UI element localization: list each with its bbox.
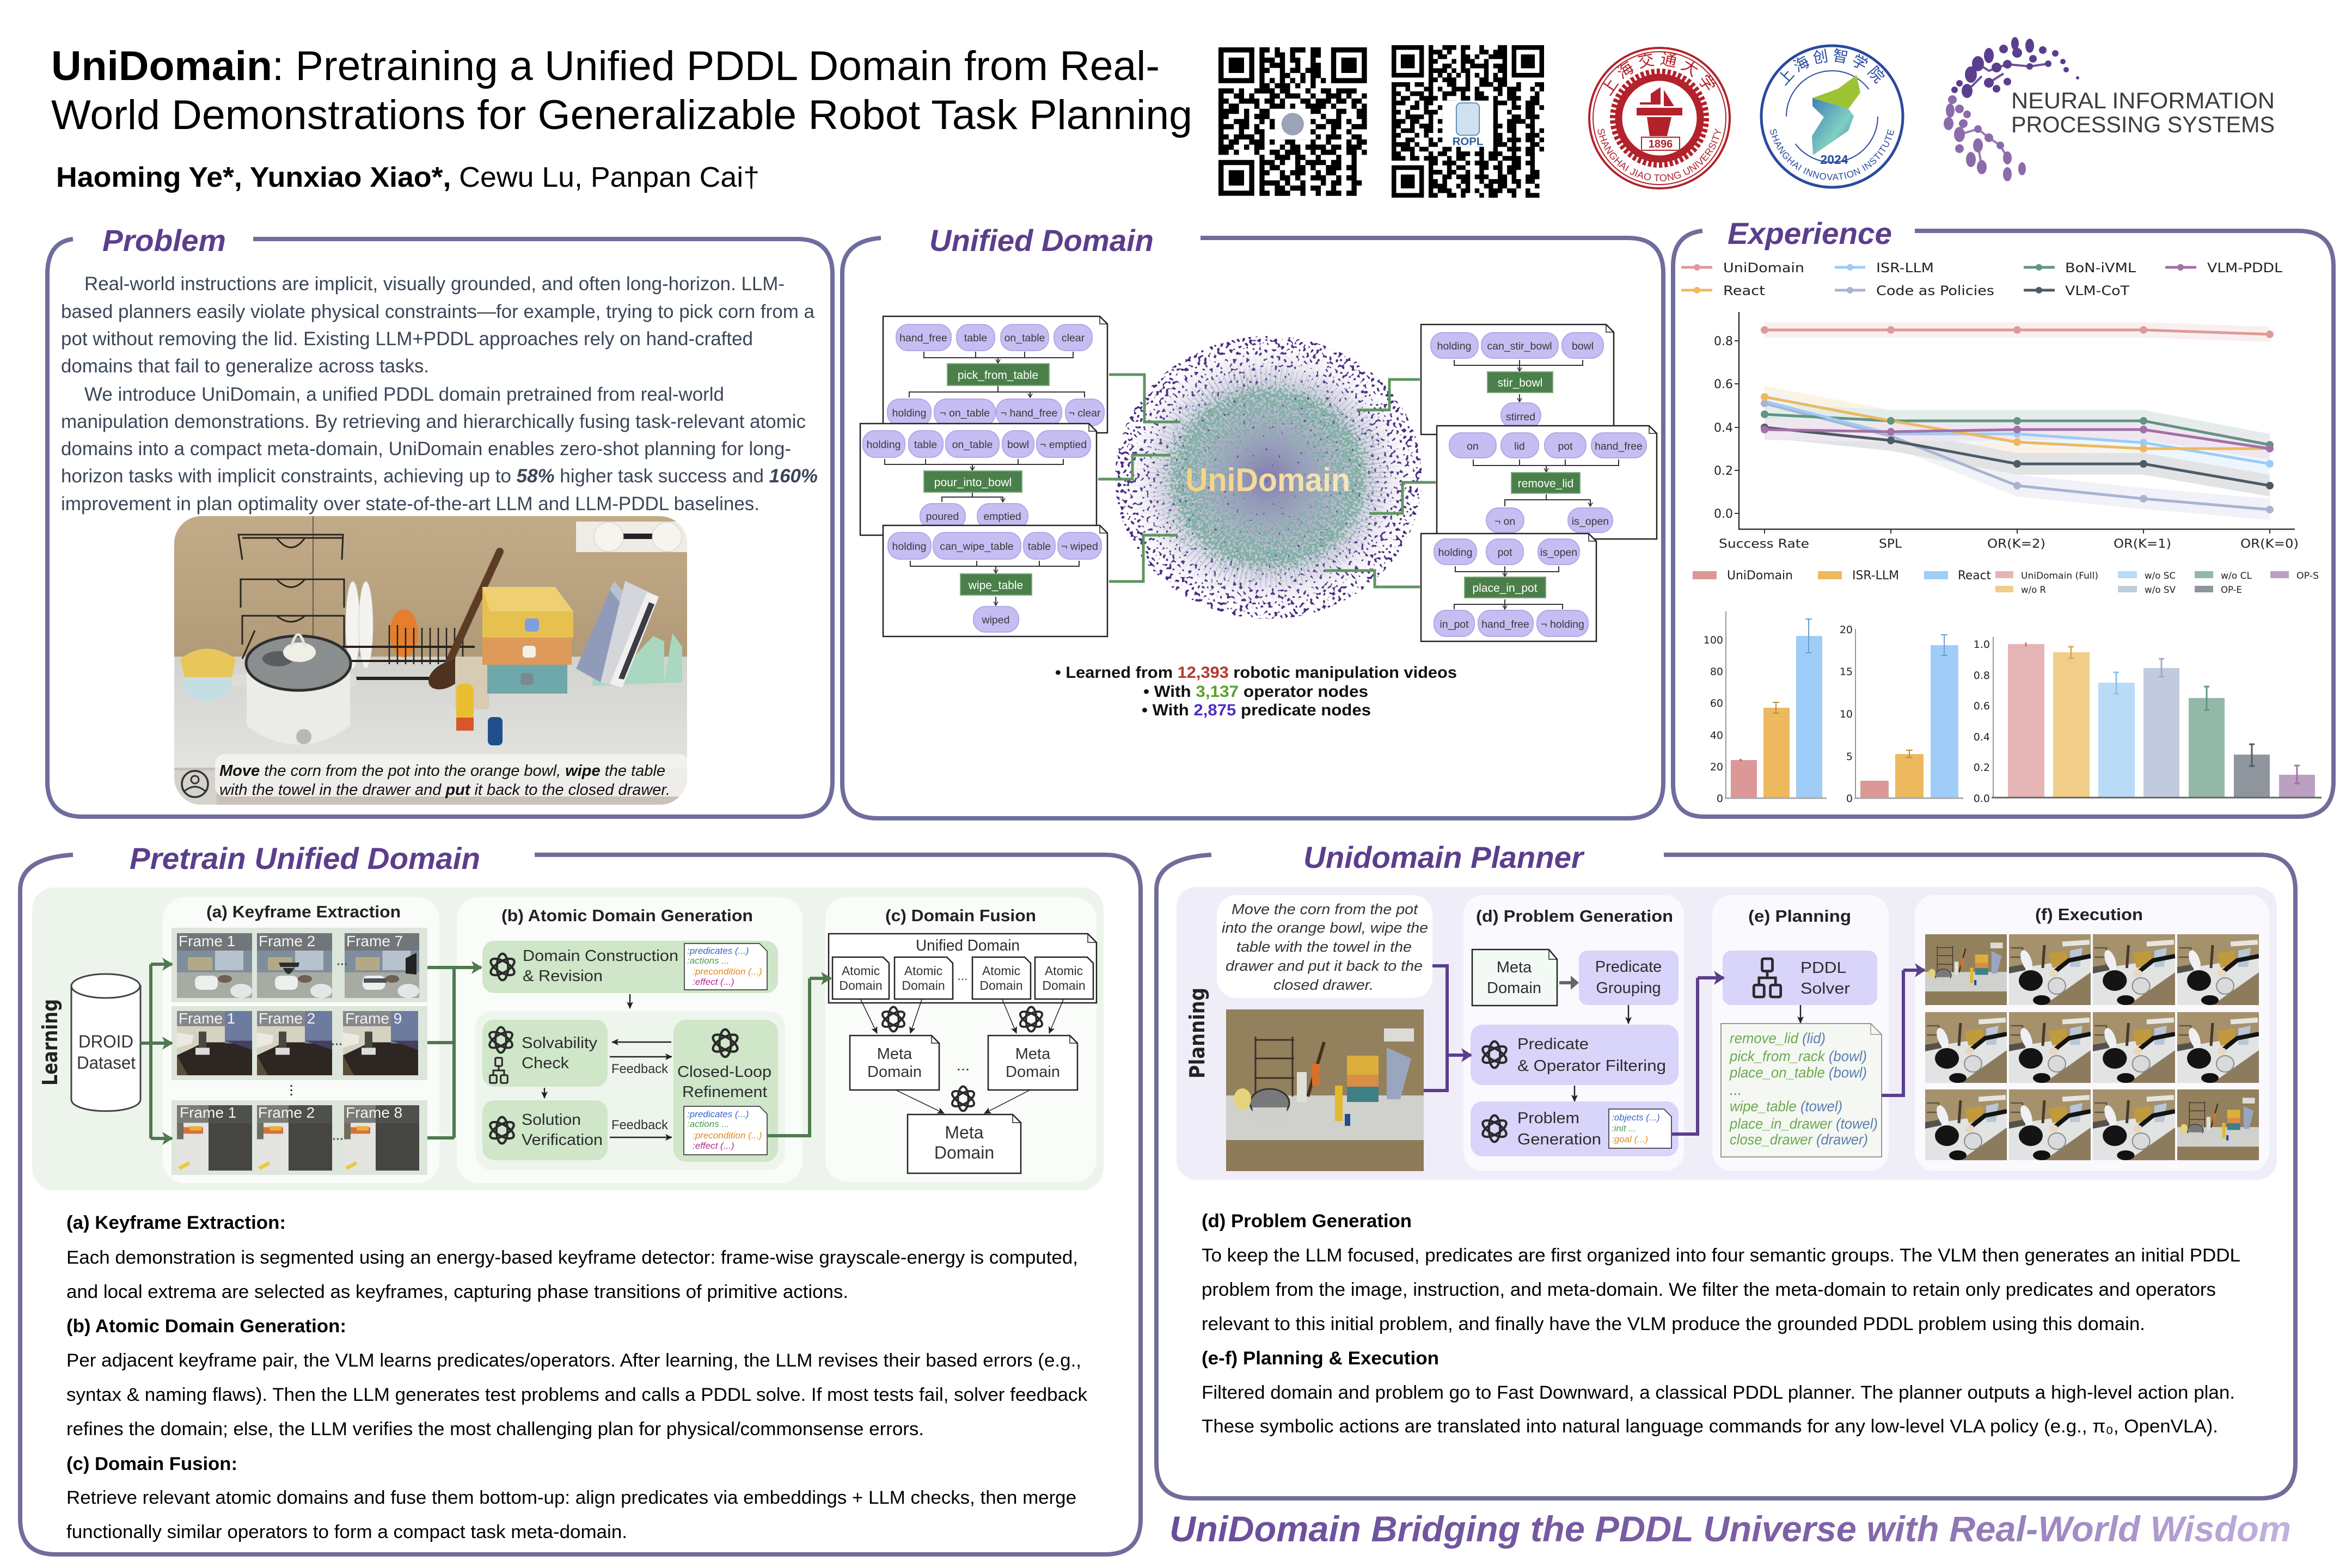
logo: Shanghai Innovation Institute: 2024: [1820, 152, 1848, 167]
panel (b): Atomic Domain Generation: :effect (...): [693, 977, 734, 987]
bar chart: time: 15: [1840, 666, 1853, 678]
legend: bar charts A: [1693, 569, 1991, 583]
logo: Shanghai Jiao Tong University seal: SHANGHAI JIAO TONG UNIVERSITY: [1597, 128, 1721, 181]
operator: remove_lid: [1437, 426, 1657, 539]
legend: line chart: [1681, 260, 2283, 298]
logo: NeurIPS: PROCESSING SYSTEMS: [2011, 112, 2275, 137]
panel (c): Domain Fusion: Meta: [945, 1123, 984, 1142]
QR code 2: [1392, 45, 1544, 198]
operator: place_in_pot: [1421, 534, 1596, 641]
text block: Atomic Domain Generation: Per adjacent keyframe pair, the VLM learns predicates/operators. After learning, the LLM revises their based errors (e.g.,: [66, 1350, 1081, 1371]
bar chart: time: 5: [1846, 751, 1853, 763]
bar chart: steps: 40: [1710, 730, 1723, 742]
photo: kitchen scene with instruction caption: [174, 516, 690, 805]
operator: wipe_table: ¬ wiped: [1061, 541, 1098, 553]
bar chart: ablation: 0.8: [1974, 670, 1990, 682]
operator: pick_from_table: clear: [1062, 332, 1085, 344]
panel (d): Problem Generation: Grouping: [1596, 979, 1661, 997]
panel (e): Planning: close_drawer (drawer): [1730, 1131, 1868, 1148]
DROID dataset cylinder: [71, 974, 140, 1111]
panel (e): Planning: pick_from_rack (bowl): [1729, 1048, 1867, 1064]
operator: place_in_pot: ¬ holding: [1541, 618, 1584, 630]
network graph: UniDomain: [1115, 336, 1422, 619]
text block: problem statement: horizon tasks with implicit constraints, achieving up to 58% higher task success and 160%: [61, 465, 818, 487]
operator: place_in_pot: in_pot: [1440, 618, 1469, 630]
panel (d): Problem Generation: Predicate: [1595, 958, 1662, 976]
panel (d): Problem Generation: & Operator Filtering: [1517, 1057, 1666, 1075]
text block: Problem Generation: problem from the image, instruction, and meta-domain. We filter the meta-domain to retain only predicates and operators: [1202, 1279, 2216, 1300]
text block: Domain Fusion: (c) Domain Fusion:: [66, 1454, 237, 1474]
text block: problem statement: domains into a compact meta-domain, UniDomain enables zero-shot planning for long-: [61, 438, 791, 460]
panel (a): Keyframe Extraction: Frame 1: [180, 1104, 236, 1121]
bar chart: steps: 0: [1717, 793, 1723, 805]
panel (c): Domain Fusion: ...: [957, 969, 968, 983]
bar chart: steps: 20: [1710, 761, 1723, 773]
legend: bar charts A: UniDomain: [1727, 569, 1793, 583]
panel (c): Domain Fusion: Domain: [979, 978, 1023, 993]
instruction card: Move the corn from the pot: [1232, 901, 1419, 917]
panel (d): Problem Generation: Meta: [1497, 959, 1532, 976]
panel (c): Domain Fusion: Domain: [867, 1063, 922, 1081]
label: UniDomain: UniDomain: [1185, 462, 1350, 498]
text block: Keyframe Extraction: Each demonstration is segmented using an energy-based keyframe detector: frame-wise grayscale-energy is computed,: [66, 1247, 1078, 1268]
arrow: problem to planner: [1671, 978, 1724, 1134]
operator: pick_from_table: hand_free: [899, 332, 947, 344]
legend: bar chart B: w/o SV: [2145, 585, 2176, 596]
logo: Shanghai Innovation Institute: SHANGHAI INNOVATION INSTITUTE: [1770, 129, 1895, 181]
panel: Experience: [1673, 216, 2333, 817]
panel (b): Atomic Domain Generation: Check: [522, 1055, 569, 1072]
legend: bar charts A: ISR-LLM: [1852, 569, 1899, 583]
operator: pick_from_table: ¬ on_table: [940, 407, 990, 419]
panel (a): Keyframe Extraction: Frame 2: [259, 933, 315, 950]
panel (d): Problem Generation: Domain: [1487, 979, 1541, 997]
legend: bar chart B: w/o R: [2021, 585, 2046, 596]
DROID dataset cylinder: Dataset: [77, 1053, 136, 1073]
operator: stir_bowl: stir_bowl: [1498, 377, 1542, 389]
arrows: inputs to problem generation: [1424, 966, 1471, 1091]
operator: pick_from_table: table: [964, 332, 987, 344]
operator: wipe_table: can_wipe_table: [940, 541, 1014, 553]
line chart: success metrics: 0.4: [1714, 421, 1733, 435]
legend: line chart: BoN-iVML: [2065, 260, 2136, 275]
operator: pour_into_bowl: pour_into_bowl: [934, 476, 1012, 489]
panel: Unified Domain: [842, 223, 1663, 818]
bar chart: time: [1840, 624, 1963, 805]
legend: bar chart B: OP-S: [2296, 571, 2319, 581]
arrows: keyframes to atomic domain: [427, 967, 481, 1138]
instruction card: table with the towel in the: [1236, 939, 1412, 955]
panel (a): Keyframe Extraction: Frame 8: [346, 1104, 402, 1121]
text block: problem statement: [61, 273, 818, 514]
caption: with the towel in the drawer and put it back to the closed drawer.: [219, 781, 670, 799]
text block: Atomic Domain Generation: [66, 1316, 1088, 1440]
operator: pour_into_bowl: emptied: [983, 511, 1021, 523]
operator: remove_lid: remove_lid: [1518, 477, 1573, 490]
panel (b): Atomic Domain Generation: :predicates (...): [687, 946, 749, 956]
text block: Problem Generation: relevant to this initial problem, and finally have the VLM produce the grounded PDDL problem using this domain.: [1202, 1314, 2145, 1334]
panel (b): Atomic Domain Generation: :actions ...: [687, 955, 729, 966]
operator: wipe_table: table: [1028, 541, 1051, 553]
text block: Atomic Domain Generation: syntax & naming flaws). Then the LLM generates test problems and calls a PDDL solve. If most tests fail, solver feedback: [66, 1385, 1088, 1405]
operator: place_in_pot: holding: [1438, 547, 1472, 559]
operator: remove_lid: on: [1467, 440, 1479, 452]
operator: wipe_table: wiped: [982, 614, 1009, 626]
arrow: plan to execution: [1882, 970, 1925, 1095]
operator: stir_bowl: bowl: [1572, 340, 1594, 352]
QR code 2: ROPL: [1453, 136, 1483, 148]
panel (c): Domain Fusion: Domain: [839, 978, 883, 993]
DROID dataset cylinder: DROID: [78, 1032, 133, 1051]
panel (b): Atomic Domain Generation: :precondition (...): [693, 966, 762, 977]
panel (a): Keyframe Extraction: Frame 1: [179, 933, 235, 950]
bar chart: ablation: 0.4: [1974, 731, 1990, 743]
operator: remove_lid: lid: [1514, 440, 1525, 452]
heading: Problem: Problem: [102, 223, 226, 258]
footer tagline: UniDomain Bridging the PDDL Universe with Real-World Wisdom: [1169, 1509, 2291, 1549]
stats list: • With 2,875 predicate nodes: [1142, 701, 1371, 719]
panel (d): Problem Generation: Predicate: [1517, 1036, 1589, 1053]
panel (d): Problem Generation: :init ...: [1612, 1123, 1636, 1134]
panel (b): Atomic Domain Generation: Feedback: [611, 1118, 669, 1132]
caption: Move the corn from the pot into the orange bowl, wipe the table: [219, 762, 665, 780]
operator: place_in_pot: hand_free: [1481, 618, 1529, 630]
title: World Demonstrations for Generalizable Robot Task Planning: [51, 92, 1192, 138]
stats list: • With 3,137 operator nodes: [1143, 683, 1368, 701]
heading: Pretrain Unified Domain: Pretrain Unified Domain: [130, 841, 480, 875]
stats list: • Learned from 12,393 robotic manipulation videos: [1055, 664, 1457, 682]
bar chart: steps: 60: [1710, 697, 1723, 709]
panel (b): Atomic Domain Generation: [457, 897, 803, 1183]
text block: Problem Generation: [1202, 1211, 2240, 1334]
panel (c): Domain Fusion: Domain: [902, 978, 945, 993]
line chart: success metrics: OR(K=0): [2240, 537, 2299, 551]
panel (b): Atomic Domain Generation: :predicates (...): [687, 1109, 749, 1119]
title: [51, 43, 1192, 138]
operator: pour_into_bowl: table: [914, 439, 937, 451]
panel (b): Atomic Domain Generation: Solution: [522, 1111, 581, 1129]
panel (c): Domain Fusion: Meta: [877, 1045, 912, 1063]
legend: line chart: UniDomain: [1723, 260, 1804, 275]
text block: Problem Generation: (d) Problem Generation: [1202, 1211, 1412, 1232]
legend: line chart: VLM-PDDL: [2207, 260, 2283, 275]
bar chart: ablation: 1.0: [1974, 639, 1990, 651]
panel (b): Atomic Domain Generation: & Revision: [523, 967, 603, 985]
panel (a): Keyframe Extraction: Frame 9: [345, 1010, 402, 1027]
operator: stir_bowl: holding: [1437, 340, 1471, 352]
panel: Pretrain Unified Domain: [20, 841, 1141, 1554]
panel (b): Atomic Domain Generation: Feedback: [611, 1062, 669, 1076]
text block: Keyframe Extraction: and local extrema are selected as keyframes, capturing phase transitions of primitive actions.: [66, 1282, 848, 1302]
label: Learning: Learning: [38, 999, 62, 1086]
bar chart: steps: [1704, 611, 1827, 805]
panel (b): Atomic Domain Generation: :effect (...): [693, 1141, 734, 1151]
panel (f): Execution: [1915, 895, 2269, 1171]
panel (a): Keyframe Extraction: Frame 2: [259, 1010, 315, 1027]
panel: Problem: [47, 223, 832, 817]
operator: remove_lid: ¬ on: [1494, 516, 1515, 528]
arrow: refinement to fusion: [767, 978, 831, 1136]
logo: Shanghai Jiao Tong University seal: 上海交通大学: [1602, 51, 1716, 96]
line chart: success metrics: 0.6: [1714, 378, 1733, 391]
text block: Planning and Execution: Filtered domain and problem go to Fast Downward, a classical PDDL planner. The planner outputs a high-level action plan.: [1202, 1382, 2235, 1403]
bar chart: time: 0: [1846, 793, 1853, 805]
operator: wipe_table: [883, 525, 1107, 636]
label: Planning: Planning: [1185, 988, 1209, 1079]
scene image: [1226, 1009, 1424, 1171]
logo: NeurIPS: [1944, 37, 2275, 181]
panel (b): Atomic Domain Generation: Closed-Loop: [677, 1063, 771, 1081]
legend: line chart: Code as Policies: [1876, 283, 1994, 298]
text block: problem statement: Real-world instructions are implicit, visually grounded, and often long-horizon. LLM-: [84, 273, 785, 295]
panel (e): Planning: place_on_table (bowl): [1729, 1064, 1867, 1081]
heading: Unidomain Planner: Unidomain Planner: [1303, 840, 1585, 874]
text block: Keyframe Extraction: [66, 1212, 1078, 1302]
legend: bar chart B: OP-E: [2221, 585, 2242, 596]
panel (e): Planning: place_in_drawer (towel): [1729, 1116, 1878, 1132]
planning pipeline diagram: [1177, 887, 2277, 1180]
line chart: success metrics: [1714, 312, 2299, 551]
bar chart: time: 20: [1840, 624, 1853, 636]
instruction card: closed drawer.: [1273, 977, 1374, 993]
panel (b): Atomic Domain Generation: Verification: [522, 1131, 603, 1149]
panel (f): Execution: (f) Execution: [2035, 905, 2143, 924]
panel (e): Planning: PDDL: [1800, 959, 1846, 977]
legend: line chart: VLM-CoT: [2065, 283, 2129, 298]
text block: Keyframe Extraction: (a) Keyframe Extraction:: [66, 1212, 286, 1233]
logo: Shanghai Innovation Institute: 上海创智学院: [1779, 48, 1885, 86]
legend: bar chart B: w/o SC: [2145, 571, 2176, 581]
operator: pick_from_table: ¬ hand_free: [1001, 407, 1057, 419]
bar chart: ablation: [1974, 637, 2322, 805]
learning pipeline diagram: [32, 887, 1104, 1190]
text block: problem statement: pot without removing the lid. Existing LLM+PDDL approaches rely on hand-crafted: [61, 328, 753, 350]
panel (c): Domain Fusion: Atomic: [904, 964, 942, 978]
operator: place_in_pot: pot: [1497, 547, 1512, 559]
panel (e): Planning: Solver: [1800, 980, 1850, 997]
authors: Haoming Ye*, Yunxiao Xiao*, Cewu Lu, Panpan Cai†: [56, 162, 759, 193]
legend: line chart: React: [1723, 283, 1765, 298]
panel (d): Problem Generation: Problem: [1517, 1110, 1579, 1127]
operator: pick_from_table: holding: [892, 407, 926, 419]
title: UniDomain: Pretraining a Unified PDDL Domain from Real-: [51, 43, 1160, 89]
panel (d): Problem Generation: :objects (...): [1612, 1112, 1660, 1123]
bar chart: ablation: 0.6: [1974, 700, 1990, 712]
stats list: [1055, 664, 1457, 719]
text block: Planning and Execution: [1202, 1348, 2235, 1437]
panel (d): Problem Generation: (d) Problem Generation: [1476, 906, 1673, 926]
operator: place_in_pot: place_in_pot: [1472, 582, 1538, 595]
operator: remove_lid: is_open: [1572, 516, 1609, 528]
operator: pick_from_table: ¬ clear: [1068, 407, 1101, 419]
operator: pick_from_table: on_table: [1004, 332, 1045, 344]
bar chart: ablation: 0.2: [1974, 762, 1990, 774]
panel (c): Domain Fusion: Unified Domain: [916, 937, 1020, 954]
text block: problem statement: based planners easily violate physical constraints—for example, trying to pick corn from a: [61, 301, 815, 322]
operator: wipe_table: holding: [892, 541, 926, 553]
panel (c): Domain Fusion: ...: [957, 1057, 970, 1074]
panel (c): Domain Fusion: Domain: [934, 1143, 994, 1162]
operator: pour_into_bowl: holding: [867, 439, 901, 451]
panel: Unidomain Planner: [1156, 840, 2295, 1498]
panel (e): Planning: (e) Planning: [1748, 906, 1851, 926]
heading: Unified Domain: Unified Domain: [929, 223, 1154, 258]
operator: remove_lid: hand_free: [1595, 440, 1643, 452]
panel (b): Atomic Domain Generation: :precondition (...): [693, 1130, 762, 1141]
arrows: dataset to keyframes: [140, 964, 172, 1138]
panel (a): Keyframe Extraction: Frame 1: [179, 1010, 235, 1027]
text block: Planning and Execution: These symbolic actions are translated into natural language commands for any low-level VLA policy (e.g., π₀, OpenVLA).: [1202, 1416, 2218, 1437]
operator: pick_from_table: pick_from_table: [958, 369, 1038, 382]
operator: wipe_table: wipe_table: [968, 579, 1023, 592]
operator: pour_into_bowl: ¬ emptied: [1040, 439, 1087, 451]
panel (a): Keyframe Extraction: (a) Keyframe Extraction: [206, 902, 401, 921]
text block: Domain Fusion: Retrieve relevant atomic domains and fuse them bottom-up: align predicates via embeddings + LLM checks, then merge: [66, 1487, 1076, 1508]
legend: bar chart B: w/o CL: [2221, 571, 2252, 581]
bar chart: time: 10: [1840, 708, 1853, 720]
panel (d): Problem Generation: Generation: [1517, 1131, 1601, 1148]
panel (c): Domain Fusion: Domain: [1006, 1063, 1060, 1081]
bar chart: steps: 80: [1710, 666, 1723, 678]
line chart: success metrics: 0.8: [1714, 335, 1733, 348]
panel (e): Planning: remove_lid (lid): [1730, 1030, 1826, 1046]
panel (e): Planning: [1712, 895, 1889, 1171]
text block: Atomic Domain Generation: (b) Atomic Domain Generation:: [66, 1316, 346, 1337]
connectors between operators and graph: [1098, 375, 1436, 587]
bar chart: ablation: 0.0: [1974, 793, 1990, 805]
line chart: success metrics: OR(K=2): [1987, 537, 2045, 551]
text block: Planning and Execution: (e-f) Planning & Execution: [1202, 1348, 1439, 1369]
legend: line chart: ISR-LLM: [1876, 260, 1934, 275]
line chart: success metrics: SPL: [1879, 537, 1902, 551]
line chart: success metrics: 0.2: [1714, 464, 1733, 478]
operator: place_in_pot: is_open: [1540, 547, 1577, 559]
panel (c): Domain Fusion: Domain: [1042, 978, 1086, 993]
text block: problem statement: improvement in plan optimality over state-of-the-art LLM and LLM-PDDL baselines.: [61, 493, 759, 514]
caption: [219, 762, 670, 799]
text block: problem statement: We introduce UniDomain, a unified PDDL domain pretrained from real-world: [84, 384, 724, 405]
bar chart: steps: 100: [1704, 634, 1723, 646]
panel (c): Domain Fusion: (c) Domain Fusion: [885, 906, 1036, 925]
operator: stir_bowl: [1421, 324, 1614, 434]
panel (b): Atomic Domain Generation: :actions ...: [687, 1119, 729, 1129]
panel (d): Problem Generation: [1463, 895, 1684, 1171]
logo: NeurIPS: NEURAL INFORMATION: [2011, 88, 2275, 113]
instruction card: drawer and put it back to the: [1226, 958, 1423, 974]
panel (d): Problem Generation: :goal (...): [1612, 1134, 1648, 1144]
legend: bar charts A: React: [1958, 569, 1991, 583]
text block: problem statement: domains that fail to generalize across tasks.: [61, 356, 429, 377]
operator: pick_from_table: [883, 316, 1107, 433]
text block: problem statement: manipulation demonstrations. By retrieving and hierarchically fusing task-relevant atomic: [61, 411, 806, 432]
line chart: success metrics: 0.0: [1714, 507, 1733, 521]
panel (c): Domain Fusion: Meta: [1015, 1045, 1051, 1063]
text block: Atomic Domain Generation: refines the domain; else, the LLM verifies the most challenging plan for physical/commonsense errors.: [66, 1419, 924, 1440]
logo: Shanghai Jiao Tong University seal: [1588, 47, 1731, 189]
legend: bar chart B: UniDomain (Full): [2021, 571, 2098, 581]
instruction card: into the orange bowl, wipe the: [1222, 920, 1428, 936]
panel (c): Domain Fusion: Atomic: [1045, 964, 1083, 978]
panel (c): Domain Fusion: Atomic: [842, 964, 880, 978]
operator: pour_into_bowl: [860, 424, 1097, 535]
logo: Shanghai Jiao Tong University seal: 1896: [1649, 138, 1673, 150]
panel (c): Domain Fusion: Atomic: [982, 964, 1020, 978]
operator: stir_bowl: can_stir_bowl: [1487, 340, 1552, 352]
panel (a): Keyframe Extraction: [163, 897, 439, 1183]
text block: Problem Generation: To keep the LLM focused, predicates are first organized into four semantic groups. The VLM then generates an initial PDDL: [1202, 1245, 2240, 1266]
line chart: success metrics: OR(K=1): [2114, 537, 2171, 551]
operator: pour_into_bowl: bowl: [1007, 439, 1029, 451]
operator: remove_lid: pot: [1558, 440, 1573, 452]
instruction card: [1217, 895, 1432, 998]
text block: Domain Fusion: functionally similar operators to form a compact task meta-domain.: [66, 1522, 627, 1542]
panel (a): Keyframe Extraction: Frame 2: [258, 1104, 315, 1121]
panel (b): Atomic Domain Generation: Solvability: [522, 1034, 598, 1052]
panel (e): Planning: wipe_table (towel): [1730, 1098, 1842, 1114]
operator: stir_bowl: stirred: [1506, 411, 1535, 423]
logo: Shanghai Innovation Institute: [1761, 46, 1903, 187]
panel (e): Planning: ...: [1730, 1082, 1742, 1098]
line chart: success metrics: Success Rate: [1719, 537, 1809, 551]
operator: pour_into_bowl: poured: [926, 511, 959, 523]
operator: pour_into_bowl: on_table: [952, 439, 993, 451]
panel (b): Atomic Domain Generation: Domain Construction: [523, 947, 678, 965]
panel (c): Domain Fusion: [825, 897, 1097, 1182]
panel (b): Atomic Domain Generation: Refinement: [682, 1083, 767, 1101]
legend: bar chart B: [1995, 571, 2319, 596]
heading: Experience: Experience: [1728, 216, 1892, 250]
panel (a): Keyframe Extraction: Frame 7: [346, 933, 403, 950]
panel (b): Atomic Domain Generation: (b) Atomic Domain Generation: [501, 906, 753, 925]
text block: Domain Fusion: [66, 1454, 1076, 1542]
QR code 1: [1218, 47, 1367, 196]
